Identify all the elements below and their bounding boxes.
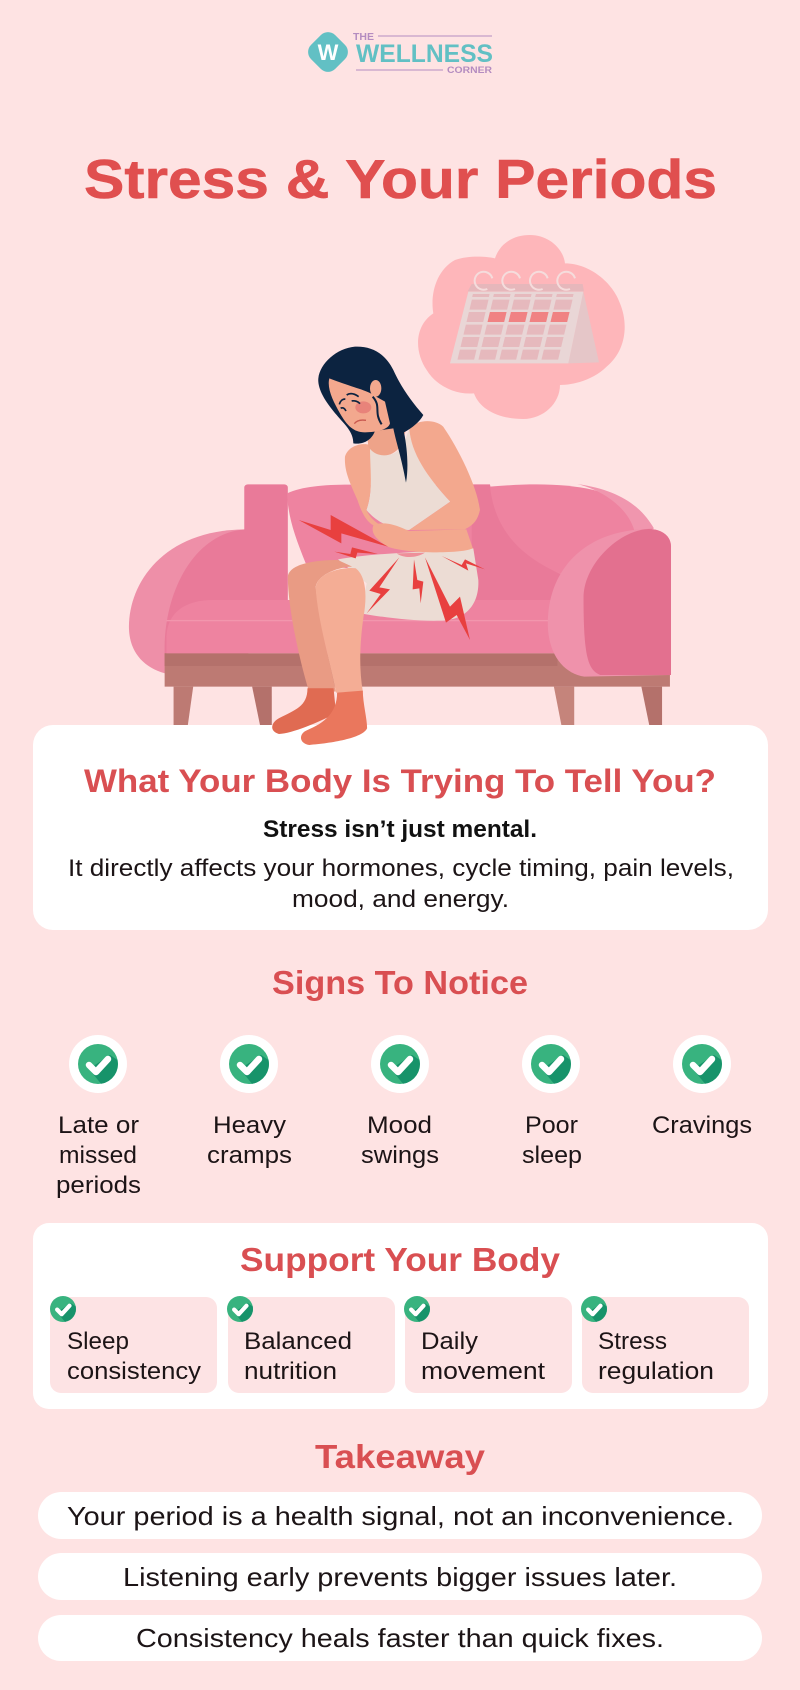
logo wordmark (353, 32, 493, 75)
neck and chest (367, 427, 407, 455)
illustration: woman holding her stomach (272, 347, 485, 745)
panel heading: What Your Body Is Trying To Tell You? (84, 763, 716, 799)
logo: The Wellness Corner (304, 28, 493, 76)
legs (288, 560, 365, 693)
sign: late or missed periods: missed (59, 1142, 137, 1169)
heading: takeaway: Takeaway (315, 1438, 486, 1475)
sign: late or missed periods: Late or (58, 1112, 139, 1139)
card: sleep consistency (50, 1296, 217, 1393)
panel lead sentence: Stress isn’t just mental. (263, 816, 537, 843)
sign: poor sleep: sleep (522, 1142, 582, 1169)
panel body text: It directly affects your hormones, cycle timing, pain levels, (68, 855, 734, 882)
logo wordmark: CORNER (447, 65, 493, 75)
logo wordmark: THE (353, 32, 374, 43)
panel: what your body is trying to tell you (33, 725, 768, 930)
panel body text: mood, and energy. (292, 886, 509, 913)
card: stress regulation: regulation (598, 1358, 714, 1385)
sign: late or missed periods (56, 1035, 141, 1199)
sign: heavy cramps (207, 1035, 292, 1169)
socks (272, 688, 367, 745)
takeaway pill 1 (38, 1492, 762, 1539)
icon: thought cloud with calendar (418, 235, 625, 419)
title: Stress & Your Periods (84, 148, 717, 210)
takeaway pill 2: Listening early prevents bigger issues later. (123, 1562, 677, 1592)
takeaway pill 3: Consistency heals faster than quick fixes. (136, 1623, 664, 1653)
logo wordmark: WELLNESS (356, 40, 493, 68)
card: stress regulation (581, 1296, 749, 1393)
sign: poor sleep: Poor (525, 1112, 578, 1139)
support heading: Support Your Body (240, 1241, 561, 1278)
card: balanced nutrition (227, 1296, 395, 1393)
shorts (338, 548, 478, 621)
card: balanced nutrition: Balanced (244, 1328, 352, 1355)
panel: support your body (33, 1223, 768, 1409)
illustration: pink sofa (129, 484, 671, 725)
card: balanced nutrition: nutrition (244, 1358, 337, 1385)
card: sleep consistency: consistency (67, 1358, 201, 1385)
card: daily movement (404, 1296, 572, 1393)
takeaway pill 1: Your period is a health signal, not an inconvenience. (67, 1501, 734, 1531)
card: sleep consistency: Sleep (67, 1328, 129, 1355)
sign: poor sleep (522, 1035, 582, 1169)
sign: mood swings (361, 1035, 439, 1169)
hair (318, 347, 423, 483)
card: stress regulation: Stress (598, 1328, 667, 1355)
takeaway pill 2 (38, 1553, 762, 1600)
sign: cravings (652, 1035, 752, 1139)
card: daily movement: movement (421, 1358, 545, 1385)
lightning bolts (299, 515, 485, 640)
logo icon: teal diamond (304, 28, 352, 76)
tank top (366, 428, 450, 530)
sign: mood swings: swings (361, 1142, 439, 1169)
card: daily movement: Daily (421, 1328, 478, 1355)
sign: late or missed periods: periods (56, 1172, 141, 1199)
logo icon: teal diamond: W (318, 40, 339, 65)
takeaway pill 3 (38, 1615, 762, 1661)
heading: signs to notice: Signs To Notice (272, 964, 528, 1001)
sign: cravings: Cravings (652, 1112, 752, 1139)
sign: heavy cramps: cramps (207, 1142, 292, 1169)
sign: mood swings: Mood (367, 1112, 432, 1139)
arms (345, 421, 480, 552)
face (329, 378, 390, 432)
panel body text (68, 855, 734, 913)
sign: heavy cramps: Heavy (213, 1112, 286, 1139)
